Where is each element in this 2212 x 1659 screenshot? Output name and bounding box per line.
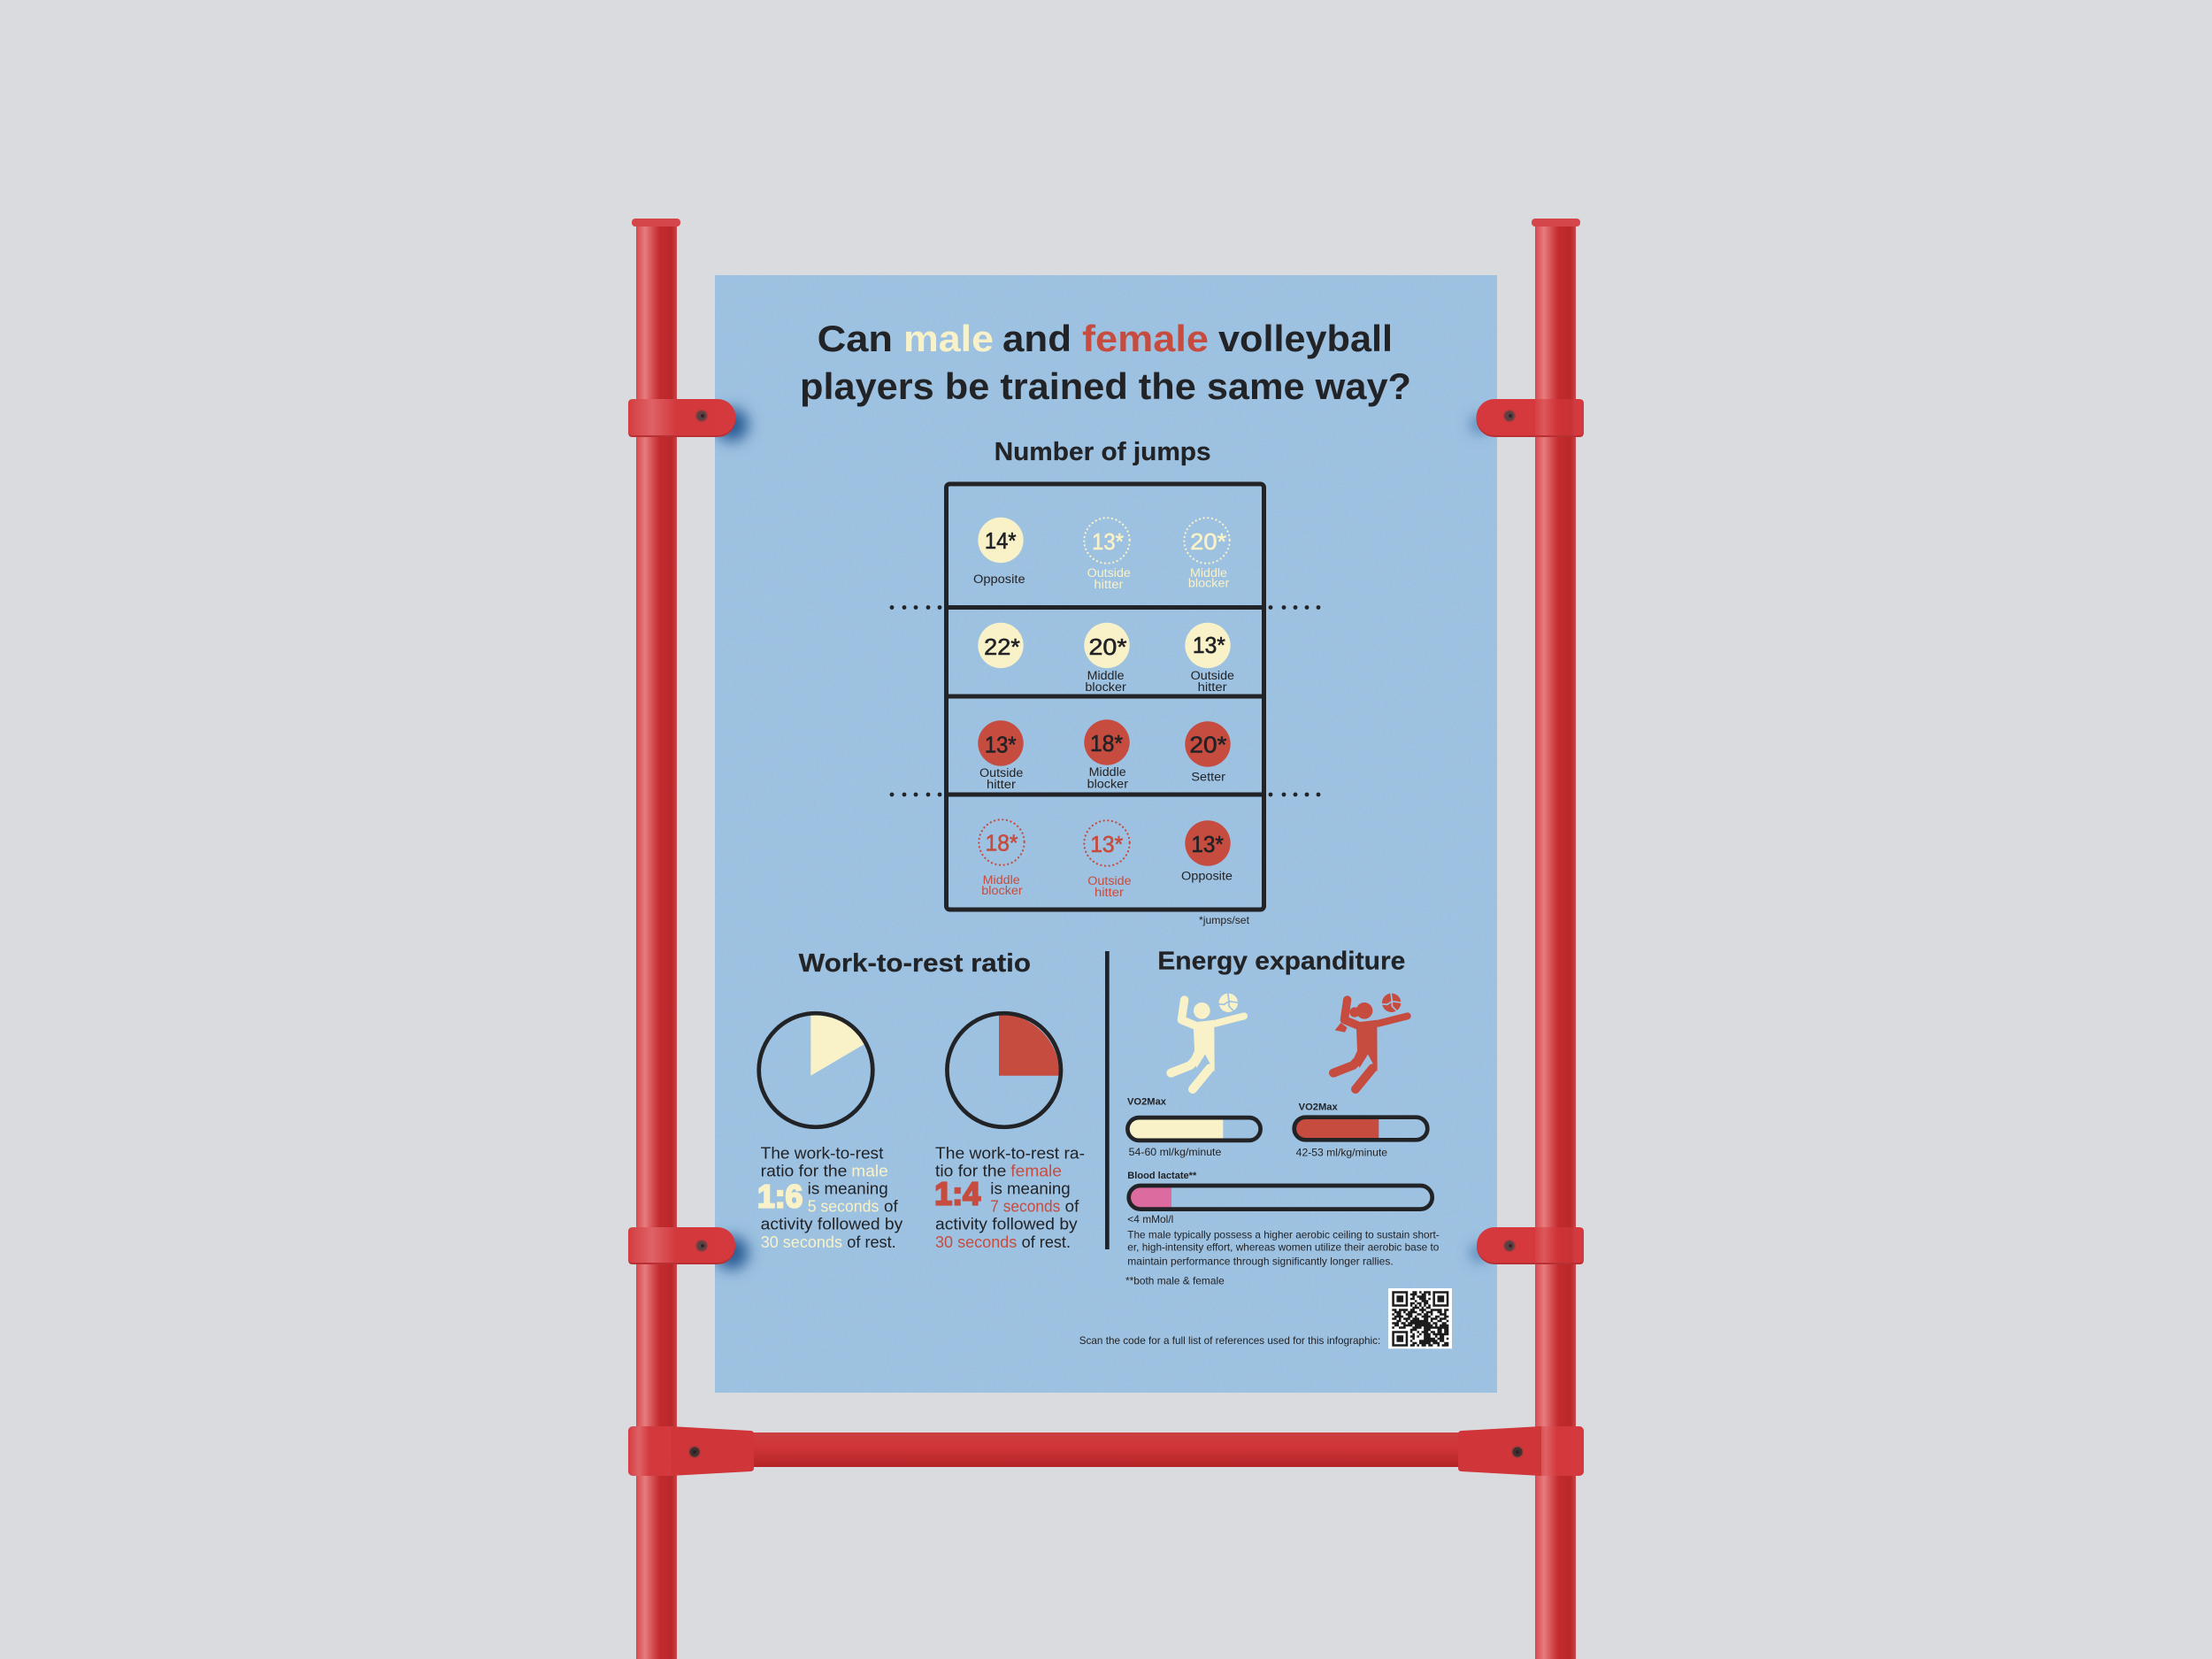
blood lactate bar: Blood lactate** <box>1127 1171 1197 1181</box>
female outside hitter <box>978 720 1024 791</box>
male outside hitter <box>1185 623 1234 694</box>
title: and <box>1002 318 1071 359</box>
poster <box>715 275 1497 1393</box>
male middle blocker, ghost <box>1184 518 1230 589</box>
junction: bottom right <box>1458 1426 1584 1476</box>
male middle blocker: Middle <box>1087 669 1125 682</box>
male outside hitter: hitter <box>1198 680 1227 694</box>
female middle blocker, ghost <box>979 819 1025 897</box>
clamp: upper right <box>1476 399 1584 437</box>
left pole <box>632 219 680 1659</box>
clamp: upper left <box>628 399 736 437</box>
female outside hitter, ghost: hitter <box>1094 886 1125 899</box>
text block: female ratio: is meaning <box>990 1179 1071 1197</box>
screw <box>1511 1446 1524 1458</box>
female outside hitter, ghost: 13* <box>1090 831 1123 857</box>
title: volleyball <box>1218 318 1393 359</box>
ratio 1:4: 1:4 <box>934 1176 980 1212</box>
female outside hitter: Outside <box>979 766 1023 780</box>
female outside hitter: hitter <box>987 778 1017 791</box>
vertical divider <box>1105 951 1110 1249</box>
male outside hitter, ghost <box>1084 518 1131 591</box>
VO2Max: female <box>1294 1102 1427 1159</box>
heading: number of jumps: Number of jumps <box>995 438 1211 466</box>
title <box>800 318 1411 407</box>
VO2Max: male: VO2Max <box>1127 1097 1167 1108</box>
female middle blocker: Middle <box>1089 765 1126 779</box>
female outside hitter, ghost: Outside <box>1087 874 1132 887</box>
pie: male ratio <box>759 1013 872 1127</box>
text block: female ratio: 30 seconds <box>935 1233 1017 1251</box>
net dots <box>890 605 1320 796</box>
text block: male ratio: 30 seconds <box>761 1233 842 1251</box>
text block: male ratio: 5 seconds <box>808 1197 879 1215</box>
text block: female ratio: 7 seconds <box>990 1197 1060 1215</box>
female outside hitter: 13* <box>985 731 1017 757</box>
VO2Max: female: 42-53 ml/kg/minute <box>1296 1147 1387 1159</box>
icon: male player spiking <box>1171 993 1244 1089</box>
text block: energy explanation: maintain performance through significantly longer rallies. <box>1127 1255 1394 1267</box>
text block: female ratio: female <box>1010 1162 1062 1179</box>
text block: female ratio: activity followed by <box>935 1215 1078 1233</box>
female outside hitter, ghost <box>1084 820 1132 899</box>
female middle blocker: blocker <box>1087 778 1129 791</box>
text block: female ratio <box>934 1144 1085 1251</box>
blood lactate bar: <4 mMol/l <box>1127 1213 1173 1225</box>
text block: male ratio <box>757 1144 902 1251</box>
title: Can <box>818 318 893 359</box>
VO2Max: male <box>1127 1097 1261 1158</box>
icon: female player spiking <box>1333 993 1408 1089</box>
male opposite: Opposite <box>973 572 1025 586</box>
text block: male ratio: of <box>884 1197 899 1215</box>
text block: male ratio: male <box>851 1162 888 1179</box>
male setter: 22* <box>984 634 1020 660</box>
text block: female ratio: tio for the <box>935 1162 1006 1179</box>
female middle blocker, ghost: blocker <box>981 884 1023 897</box>
VO2Max: male: 54-60 ml/kg/minute <box>1129 1146 1222 1158</box>
text block: male ratio: ratio for the <box>761 1162 847 1179</box>
text block: male ratio: activity followed by <box>761 1215 902 1233</box>
male opposite <box>973 518 1025 586</box>
male outside hitter: 13* <box>1193 632 1225 658</box>
text block: energy explanation: The male typically possess a higher aerobic ceiling to sustain short- <box>1127 1229 1440 1241</box>
text block: female ratio: The work-to-rest ra- <box>935 1144 1085 1162</box>
male middle blocker, ghost: Middle <box>1190 566 1227 580</box>
clamp: middle right <box>1477 1227 1584 1264</box>
screw <box>695 410 708 422</box>
female opposite: Opposite <box>1181 869 1233 883</box>
screw <box>688 1446 701 1458</box>
junction: bottom left <box>628 1426 754 1476</box>
title: players be trained the same way? <box>800 365 1411 407</box>
text block: energy explanation <box>1127 1229 1440 1267</box>
text block: female ratio: of <box>1065 1197 1079 1215</box>
clamp shadows <box>715 408 1487 1270</box>
QR code <box>1388 1288 1452 1348</box>
text block: male ratio: is meaning <box>808 1179 888 1197</box>
ratio 1:6: 1:6 <box>757 1178 803 1214</box>
VO2Max: female: VO2Max <box>1299 1102 1339 1112</box>
court outline <box>946 484 1264 910</box>
screw <box>695 1240 708 1252</box>
male outside hitter, ghost: Outside <box>1087 566 1131 580</box>
female opposite: 13* <box>1191 831 1224 857</box>
title: male <box>903 318 994 359</box>
footnote: both male and female: **both male & female <box>1125 1274 1225 1286</box>
male middle blocker, ghost: 20* <box>1190 528 1226 555</box>
blood lactate bar <box>1127 1171 1432 1225</box>
heading: work-to-rest ratio: Work-to-rest ratio <box>799 949 1031 978</box>
text block: male ratio: The work-to-rest <box>761 1144 883 1162</box>
male middle blocker: blocker <box>1085 680 1126 694</box>
volleyball court chart <box>890 484 1320 910</box>
male middle blocker: 20* <box>1088 634 1127 660</box>
male outside hitter: Outside <box>1191 669 1234 682</box>
male opposite: 14* <box>985 527 1017 554</box>
female setter: Setter <box>1191 771 1226 784</box>
male middle blocker <box>1084 623 1130 694</box>
male outside hitter, ghost: hitter <box>1094 578 1124 591</box>
references note: Scan the code for a full list of references used for this infographic: <box>1079 1334 1380 1347</box>
female opposite <box>1181 820 1233 883</box>
screw <box>1503 1240 1516 1252</box>
female middle blocker: 18* <box>1090 730 1123 757</box>
female middle blocker, ghost: Middle <box>983 873 1020 887</box>
footnote: jumps per set: *jumps/set <box>1199 914 1250 926</box>
heading: energy expenditure: Energy expanditure <box>1157 948 1405 976</box>
text block: male ratio: of rest. <box>847 1233 896 1251</box>
male middle blocker, ghost: blocker <box>1188 577 1230 589</box>
text block: female ratio: of rest. <box>1022 1233 1071 1251</box>
screw <box>1503 410 1516 422</box>
text block: energy explanation: er, high-intensity effort, whereas women utilize their aerobic base to <box>1127 1240 1440 1253</box>
bottom crossbar <box>752 1432 1460 1467</box>
title: female <box>1082 318 1209 359</box>
male outside hitter, ghost: 13* <box>1092 528 1124 555</box>
pie: female ratio <box>947 1013 1061 1127</box>
male setter <box>978 623 1024 668</box>
female setter <box>1185 721 1231 784</box>
right pole <box>1532 219 1580 1659</box>
female setter: 20* <box>1189 732 1226 758</box>
female middle blocker <box>1084 719 1130 791</box>
female middle blocker, ghost: 18* <box>986 830 1018 856</box>
clamp: middle left <box>628 1227 735 1264</box>
